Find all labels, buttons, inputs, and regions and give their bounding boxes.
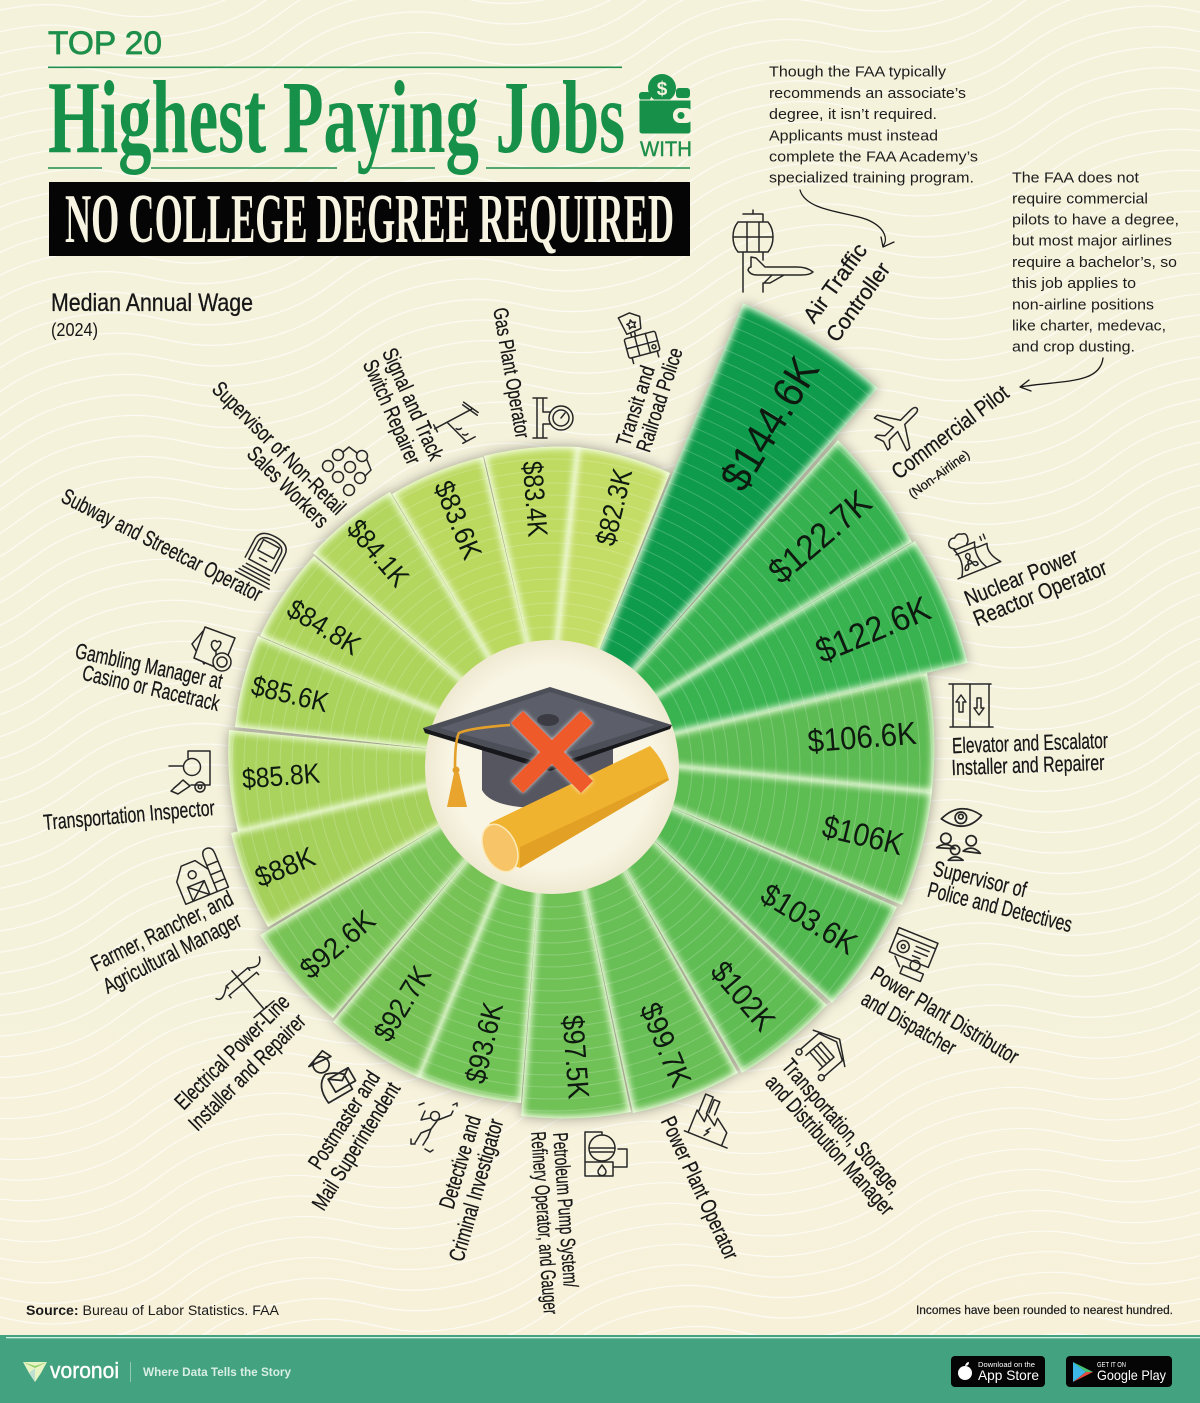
source note: Source: Bureau of Labor Statistics. FAA [26,1303,279,1318]
value: supervisor of non-retail sales workers: $84.1K [341,513,415,593]
icon: elevator doors [949,684,993,727]
value: supervisor of police: $106K [819,808,907,862]
callout: air traffic controller note [769,64,978,187]
title block [48,25,693,258]
value: elevator installer: $106.6K [806,715,918,759]
rounding note: Incomes have been rounded to nearest hundred. [916,1305,1173,1317]
icon: gas pipe and gauge [533,398,573,438]
wedge: power plant operator [580,855,738,1113]
value: power plant distributor: $103.6K [755,876,864,962]
label: petroleum pump system, refinery operator, gauger: Petroleum Pump System/ [548,1132,582,1288]
center icon: graduation cap, diploma and cross [423,640,679,894]
callout: air traffic controller note: Though the FAA typically [769,64,947,81]
label: commercial pilot [865,380,1013,501]
label: farmer, rancher, agricultural manager: Farmer, Rancher, and [87,886,237,976]
wedge: subway and streetcar operator [260,556,480,720]
label: signal and track switch repairer: Switch Repairer [358,356,426,468]
callout: commercial pilot note: like charter, medevac, [1012,317,1166,334]
label: gambling manager at casino or racetrack: Gambling Manager at [73,638,225,694]
value: electrical power-line installer: $92.6K [294,904,382,986]
wedge: electrical power-line installer [260,815,480,1018]
wedge: commercial pilot [621,440,912,707]
wedge: transportation, storage manager [616,818,827,1073]
callout: commercial pilot note: require a bachelor’s, so [1012,254,1177,271]
callout: commercial pilot note: but most major airlines [1012,233,1172,250]
wedge: farmer, rancher, agricultural manager [231,780,458,927]
callout: commercial pilot note: pilots to have a degree, [1012,212,1179,229]
icon: refinery tank [585,1132,627,1176]
callout: commercial pilot note: non-airline positions [1012,296,1154,313]
value: signal and track switch repairer: $83.6K [428,476,488,564]
label: supervisor of non-retail sales workers: Supervisor of Non-Retail [207,376,351,520]
label: transportation, storage, distribution manager [760,1021,907,1220]
label: farmer, rancher, agricultural manager [87,846,245,999]
wedge: petroleum [521,868,631,1119]
label: power plant distributor and dispatcher: and Dispatcher [857,986,961,1060]
icon: wallet: $ [657,79,668,100]
wedge: supervisor of non-retail sales workers [313,492,502,696]
google play badge: Google Play [1097,1367,1166,1383]
icon: people network [322,447,371,496]
value: transportation inspector: $85.8K [241,757,321,795]
label: detective and criminal investigator: Criminal Investigator [444,1116,508,1264]
label: air traffic controller: Controller [821,257,895,347]
wedge: transportation inspector [228,730,450,832]
app store badge: App Store [978,1367,1039,1383]
icon: police badge and train [618,308,662,364]
label: gas plant operator [488,306,573,440]
icon: power pole [209,952,287,1028]
icon: wallet [639,74,693,134]
label: nuclear power reactor operator: Reactor Operator [969,555,1111,631]
google play badge [1066,1356,1172,1387]
value: nuclear reactor operator: $122.6K [810,589,936,671]
wedge: signal and track switch repairer [392,457,533,679]
tassel [455,725,510,768]
label: subway and streetcar operator: Subway and Streetcar Operator [57,483,267,607]
callout: commercial pilot note: The FAA does not [1012,169,1140,186]
label: electrical power-line installer: Electrical Power-Line [169,989,295,1115]
chart legend: median annual wage: Median Annual Wage [51,289,253,317]
callout: commercial pilot note [1012,169,1179,356]
value: detective: $93.6K [460,999,510,1087]
value: air traffic controller: $144.6K [711,349,829,499]
icon: cooling towers [943,523,1001,579]
callout: air traffic controller note: specialized training program. [769,170,974,187]
wedge: nuclear reactor operator [638,541,968,739]
icon: barn and silo [169,846,228,904]
diploma scroll [475,746,669,877]
label: gambling manager at casino or racetrack: Casino or Racetrack [80,660,223,716]
icon: eye above people [937,809,982,860]
label: transportation inspector [42,751,216,835]
label: transportation, storage, distribution manager: Transportation, Storage, [777,1054,907,1198]
label: supervisor of non-retail sales workers: Sales Workers [242,441,334,533]
radial bar chart [220,298,974,1126]
label: elevator and escalator installer: Elevator and Escalator [952,728,1108,758]
wedge: elevator installer [651,673,934,792]
label: gambling manager at casino or racetrack [73,627,235,716]
label: transit and railroad police: Railroad Police [632,345,688,455]
wedge: gas plant operator [484,447,578,668]
value: gambling manager: $85.6K [248,670,332,718]
footer band [0,1335,1200,1403]
icon: magnifier over truck [169,751,210,794]
wedge: detective [418,863,540,1103]
label: nuclear power reactor operator [943,523,1111,631]
wedge: postmaster [333,844,508,1078]
label: air traffic controller [733,210,895,347]
main title: Highest Paying Jobs [48,60,625,175]
wedge: transit and railroad police [554,447,670,668]
cap base [482,748,613,808]
chart legend: median annual wage: (2024) [51,320,98,340]
callout: air traffic controller note: recommends an associate’s [769,85,966,102]
icon: control tower and plane [733,210,813,292]
label: postmaster and mail superintendent: Postmaster and [303,1066,385,1174]
voronoi logo [23,1358,119,1383]
label: transportation inspector: Transportation Inspector [42,795,216,835]
label: elevator and escalator installer [949,684,1108,780]
tagline: Where Data Tells the Story [143,1365,291,1379]
red cross [517,717,587,787]
icon: airplane [865,392,933,460]
label: commercial pilot: Commercial Pilot [887,380,1013,484]
value: commercial pilot: $122.7K [761,483,879,591]
callout: commercial pilot note: and crop dusting. [1012,339,1135,356]
subtitle banner [49,181,690,258]
value: petroleum: $97.5K [555,1014,595,1100]
label: supervisor of police and detectives: Supervisor of [931,856,1030,902]
wedge shapes [228,303,968,1119]
label: power plant operator [656,1092,744,1264]
callout: commercial pilot note: require commercial [1012,191,1148,208]
label: signal and track switch repairer [358,344,488,468]
label: detective and criminal investigator: Detective and [434,1112,486,1212]
wedge: gambling manager [235,636,457,751]
label: nuclear power reactor operator: Nuclear Power [961,543,1081,611]
label: power plant distributor and dispatcher [857,928,1023,1069]
icon: mail carrier [304,1044,358,1103]
label: power plant distributor and dispatcher: Power Plant Distributor [867,961,1023,1069]
wage values [241,349,936,1100]
app store badge: Download on the [978,1362,1035,1369]
label: petroleum pump system, refinery operator, gauger [526,1131,627,1315]
value: farmer, rancher, agricultural manager: $88K [250,841,320,893]
label: gas plant operator: Gas Plant Operator [488,306,534,440]
app store badge [951,1356,1045,1387]
label: elevator and escalator installer: Installer and Repairer [951,750,1105,780]
cap board [423,687,672,766]
kicker: top 20: TOP 20 [48,25,162,61]
callout: air traffic controller note: complete the FAA Academy’s [769,149,978,166]
value: subway and streetcar operator: $84.8K [282,593,366,661]
label: farmer, rancher, agricultural manager: Agricultural Manager [99,907,245,999]
icon: subway train [235,528,292,589]
label: commercial pilot: (Non-Airline) [905,447,973,501]
label: subway and streetcar operator [57,483,292,607]
callout: commercial pilot note: this job applies to [1012,275,1136,292]
icon: warehouse with forklift [792,1021,855,1085]
word: with: WITH [640,138,692,161]
label: supervisor of police and detectives: Police and Detectives [925,877,1075,937]
label: detective and criminal investigator [411,1103,508,1264]
wedge: supervisor of police [650,764,932,905]
icon: control panel [883,928,938,982]
chart legend: median annual wage [51,289,253,340]
voronoi logo: voronoi [50,1358,119,1383]
value: power plant operator: $99.7K [633,998,697,1092]
arrow: to commercial pilot [1020,358,1103,391]
icon: rail signal [430,398,488,452]
icon: power plant [684,1092,743,1148]
label: postmaster and mail superintendent: Mail Superintendent [307,1077,405,1215]
callout: air traffic controller note: degree, it isn’t required. [769,106,937,123]
label: transportation, storage, distribution manager: and Distribution Manager [760,1070,900,1220]
callout: air traffic controller note: Applicants must instead [769,127,938,144]
icon: playing cards [192,627,235,671]
icon: chalk outline [411,1103,457,1152]
label: supervisor of police and detectives [925,809,1075,937]
label: transit and railroad police: Transit and [612,363,660,449]
label: signal and track switch repairer: Signal and Track [377,344,449,465]
label: power plant operator: Power Plant Operator [656,1112,744,1264]
wedge: air traffic controller [592,303,878,685]
label: electrical power-line installer: Installer and Repairer [183,1008,311,1136]
arrow: to air traffic controller [800,190,894,247]
wedge: power plant distributor [630,798,897,1003]
label: air traffic controller: Air Traffic [798,238,872,328]
value: gas plant operator: $83.4K [517,460,553,538]
value: transit and railroad police: $82.3K [590,465,638,549]
label: transit and railroad police [612,308,688,455]
google play badge: GET IT ON [1097,1362,1126,1369]
value: postmaster: $92.7K [368,960,438,1047]
value: transportation, storage manager: $102K [704,954,782,1038]
